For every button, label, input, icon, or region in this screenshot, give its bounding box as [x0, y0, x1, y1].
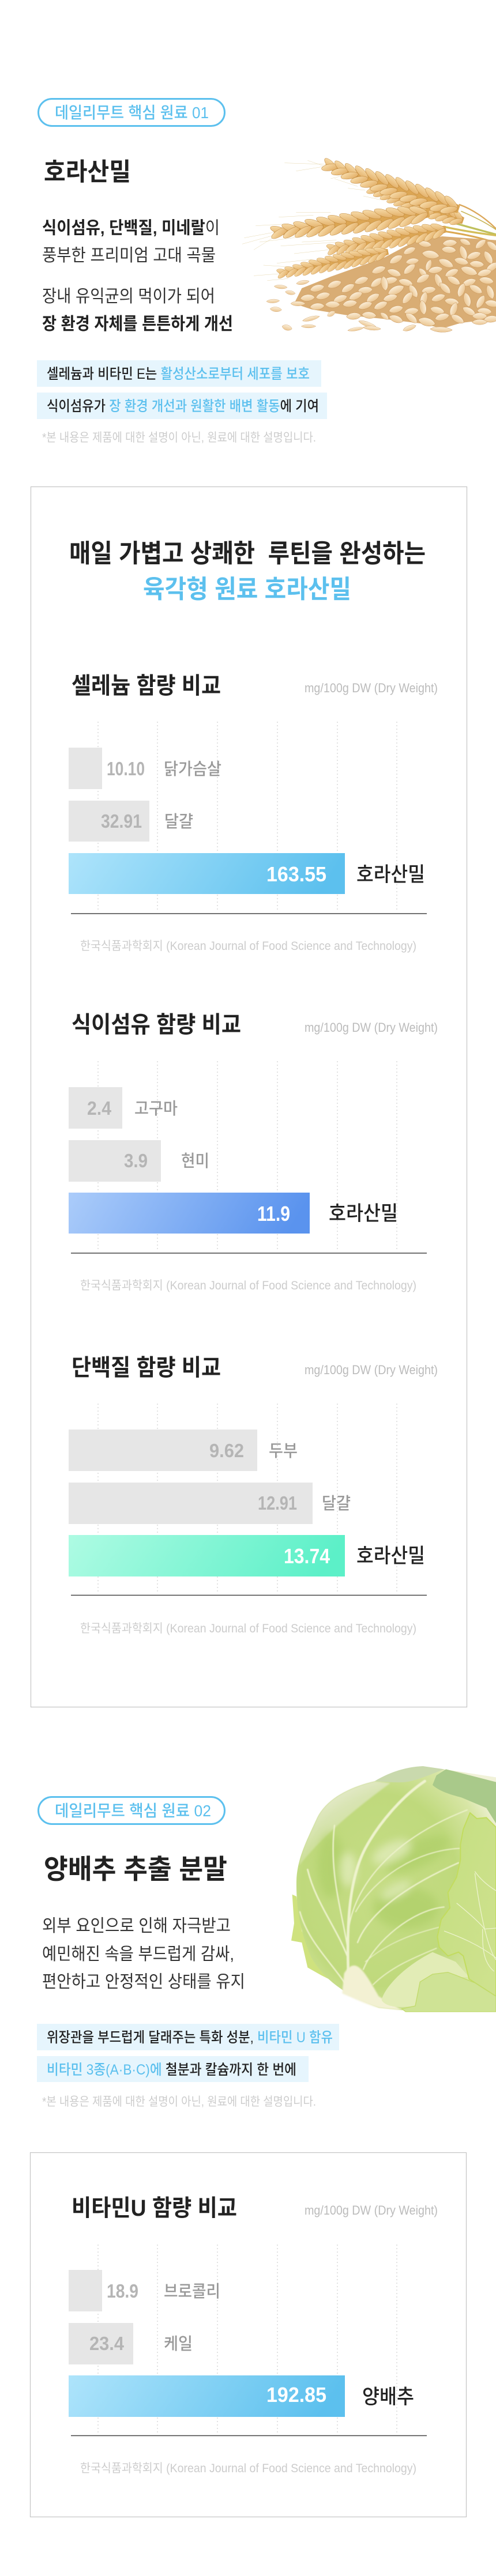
- bar: 달걀: [69, 801, 193, 842]
- cabbage dark top-right leaf: [433, 1769, 496, 1823]
- panel heading: 육각형 원료 호라산밀: [143, 575, 351, 604]
- bar: 달걀: 달걀: [164, 812, 193, 831]
- bar: 고구마: [69, 1087, 178, 1129]
- right leaf veins: [444, 1872, 496, 1971]
- bar: 고구마: 고구마: [134, 1099, 178, 1118]
- bar: 현미: 현미: [181, 1152, 209, 1171]
- axis: [71, 2435, 427, 2436]
- body text: 장 환경 자체를 튼튼하게 개선: [42, 315, 233, 334]
- bar: 호라산밀: [69, 1535, 425, 1576]
- body text: 예민해진 속을 부드럽게 감싸,: [42, 1945, 234, 1964]
- cabbage back frill: [291, 1895, 340, 1985]
- callout: 식이섬유: [37, 393, 327, 419]
- panel heading: 매일 가볍고 상쾌한 루틴을 완성하는: [69, 540, 426, 568]
- bar: 브로콜리: [69, 2270, 220, 2311]
- badge: 데일리무트 핵심 원료 02: 데일리무트 핵심 원료 02: [55, 1802, 211, 1820]
- bar: 달걀: 12.91: [258, 1492, 297, 1514]
- disclaimer note: *본 내용은 제품에 대한 설명이 아닌, 원료에 대한 설명입니다.: [42, 2095, 316, 2109]
- bar: 브로콜리: 브로콜리: [164, 2283, 220, 2301]
- wheat awns: [242, 160, 381, 281]
- callout: 비타민 3종: [37, 2056, 309, 2082]
- bar: 두부: 9.62: [209, 1440, 244, 1461]
- unit: mg/100g DW (Dry Weight): [305, 1363, 438, 1377]
- bar: 두부: 두부: [269, 1442, 298, 1461]
- title: 호라산밀: 호라산밀: [44, 159, 131, 186]
- callout: 비타민 3종: 비타민 3종(A·B·C)에 철분과 칼슘까지 한 번에: [47, 2062, 296, 2078]
- wheat ear bottom: [275, 242, 390, 284]
- wheat ear middle: [268, 201, 431, 246]
- title: 양배추 추출 분말: 양배추 추출 분말: [44, 1854, 227, 1884]
- unit: mg/100g DW (Dry Weight): [305, 1020, 438, 1035]
- bar: 두부: [69, 1430, 298, 1471]
- grain pile base: [294, 236, 496, 329]
- chart: 셀레늄 함량 비교: [69, 673, 438, 953]
- bar: 호라산밀: [69, 853, 425, 894]
- body text: [42, 219, 233, 334]
- badge: 데일리무트 핵심 원료 01: 데일리무트 핵심 원료 01: [55, 104, 209, 122]
- panel: 호라산밀 comparison charts: [31, 486, 467, 1707]
- callout: 식이섬유: 식이섬유가 장 환경 개선과 원활한 배변 활동에 기여: [47, 398, 319, 414]
- body text: 편안하고 안정적인 상태를 유지: [42, 1972, 245, 1992]
- callout: 셀레늄: 셀레늄과 비타민 E는 활성산소로부터 세포를 보호: [47, 366, 310, 382]
- body text: 풍부한 프리미엄 고대 곡물: [42, 246, 216, 265]
- bar: 호라산밀: [69, 1193, 398, 1234]
- panel heading: [69, 540, 426, 604]
- body text: 식이섬유, 단백질, 미네랄이: [42, 219, 220, 237]
- scattered grains: [266, 280, 487, 333]
- bar: 양배추: [69, 2375, 414, 2417]
- callout: 비타민 U: 위장관을 부드럽게 달래주는 특화 성분, 비타민 U 함유: [47, 2030, 333, 2046]
- chart title: 셀레늄 함량 비교: [72, 673, 221, 699]
- cabbage base: [342, 1966, 402, 2010]
- badge: 데일리무트 핵심 원료 02: [38, 1797, 225, 1824]
- cabbage green patches: [317, 1827, 454, 1929]
- badge: 데일리무트 핵심 원료 01: [38, 99, 225, 126]
- cabbage head: [296, 1768, 496, 2012]
- wheat ear top: [318, 151, 463, 221]
- axis: [71, 1594, 427, 1596]
- wheat stems: [429, 205, 496, 243]
- bar: 닭가슴살: [69, 748, 221, 789]
- bar: 호라산밀: 163.55: [266, 862, 326, 886]
- bar: 달걀: 32.91: [101, 810, 142, 832]
- axis: [71, 1253, 427, 1254]
- section: ingredient 02 intro: [37, 1766, 496, 2109]
- bar: 양배추: 192.85: [266, 2383, 326, 2407]
- callout: 셀레늄: [37, 360, 321, 387]
- bar: 호라산밀: 13.74: [284, 1544, 330, 1568]
- source: 한국식품과학회지 (Korean Journal of Food Science and Technology): [80, 1279, 416, 1292]
- chart: 단백질 함량 비교: [69, 1355, 438, 1635]
- chart title: 식이섬유 함량 비교: [72, 1012, 241, 1038]
- unit: mg/100g DW (Dry Weight): [305, 681, 438, 695]
- bar: 케일: 23.4: [89, 2333, 125, 2354]
- bar: 달걀: 달걀: [322, 1494, 351, 1513]
- body text: [42, 1917, 245, 1992]
- bar: 호라산밀: 11.9: [257, 1202, 290, 1225]
- bar: 호라산밀: 호라산밀: [329, 1202, 398, 1225]
- source: 한국식품과학회지 (Korean Journal of Food Science and Technology): [80, 940, 416, 953]
- axis: [71, 913, 427, 914]
- chart: 식이섬유 함량 비교: [69, 1012, 438, 1292]
- bar: 닭가슴살: 닭가슴살: [164, 760, 221, 779]
- bar: 고구마: 2.4: [87, 1097, 112, 1119]
- cabbage pale top-left: [299, 1781, 390, 1866]
- bar: 닭가슴살: 10.10: [107, 758, 145, 779]
- panel: 양배추 comparison chart: [30, 2152, 466, 2517]
- disclaimer note: *본 내용은 제품에 대한 설명이 아닌, 원료에 대한 설명입니다.: [42, 431, 316, 444]
- source: 한국식품과학회지 (Korean Journal of Food Science and Technology): [80, 1622, 416, 1635]
- wheat ear behind: [363, 177, 467, 231]
- cabbage top leaves: [375, 1766, 444, 1782]
- bar: 현미: [69, 1140, 209, 1182]
- body text: 장내 유익균의 먹이가 되어: [42, 287, 215, 306]
- wheat ear lower: [324, 218, 448, 261]
- bar: 양배추: 양배추: [362, 2386, 414, 2408]
- callout: 비타민 U: [37, 2024, 339, 2050]
- cabbage highlights: [339, 1835, 415, 1904]
- bar: 케일: [69, 2323, 193, 2364]
- bar: 현미: 3.9: [124, 1150, 148, 1171]
- chart title: 비타민U 함량 비교: [72, 2196, 237, 2221]
- image: wheat ears and grain pile: [242, 151, 496, 333]
- bar: 브로콜리: 18.9: [107, 2280, 138, 2302]
- grain pile kernels: [300, 237, 496, 328]
- cabbage pale lower leaf: [382, 1952, 469, 2007]
- image: cabbage: [291, 1766, 496, 2012]
- source: 한국식품과학회지 (Korean Journal of Food Science and Technology): [80, 2462, 416, 2475]
- bar: 호라산밀: 호라산밀: [356, 863, 425, 886]
- section: ingredient 01 intro: [37, 99, 496, 444]
- bar: 달걀: [69, 1483, 351, 1524]
- chart title: 단백질 함량 비교: [72, 1355, 221, 1381]
- bar: 호라산밀: 호라산밀: [356, 1545, 425, 1567]
- cabbage veins: [300, 1781, 467, 1989]
- bar: 케일: 케일: [164, 2334, 193, 2354]
- cabbage right leaf: [437, 1813, 496, 1996]
- cabbage lower right leaf: [402, 1972, 496, 2012]
- body text: 외부 요인으로 인해 자극받고: [42, 1917, 231, 1936]
- unit: mg/100g DW (Dry Weight): [305, 2203, 438, 2217]
